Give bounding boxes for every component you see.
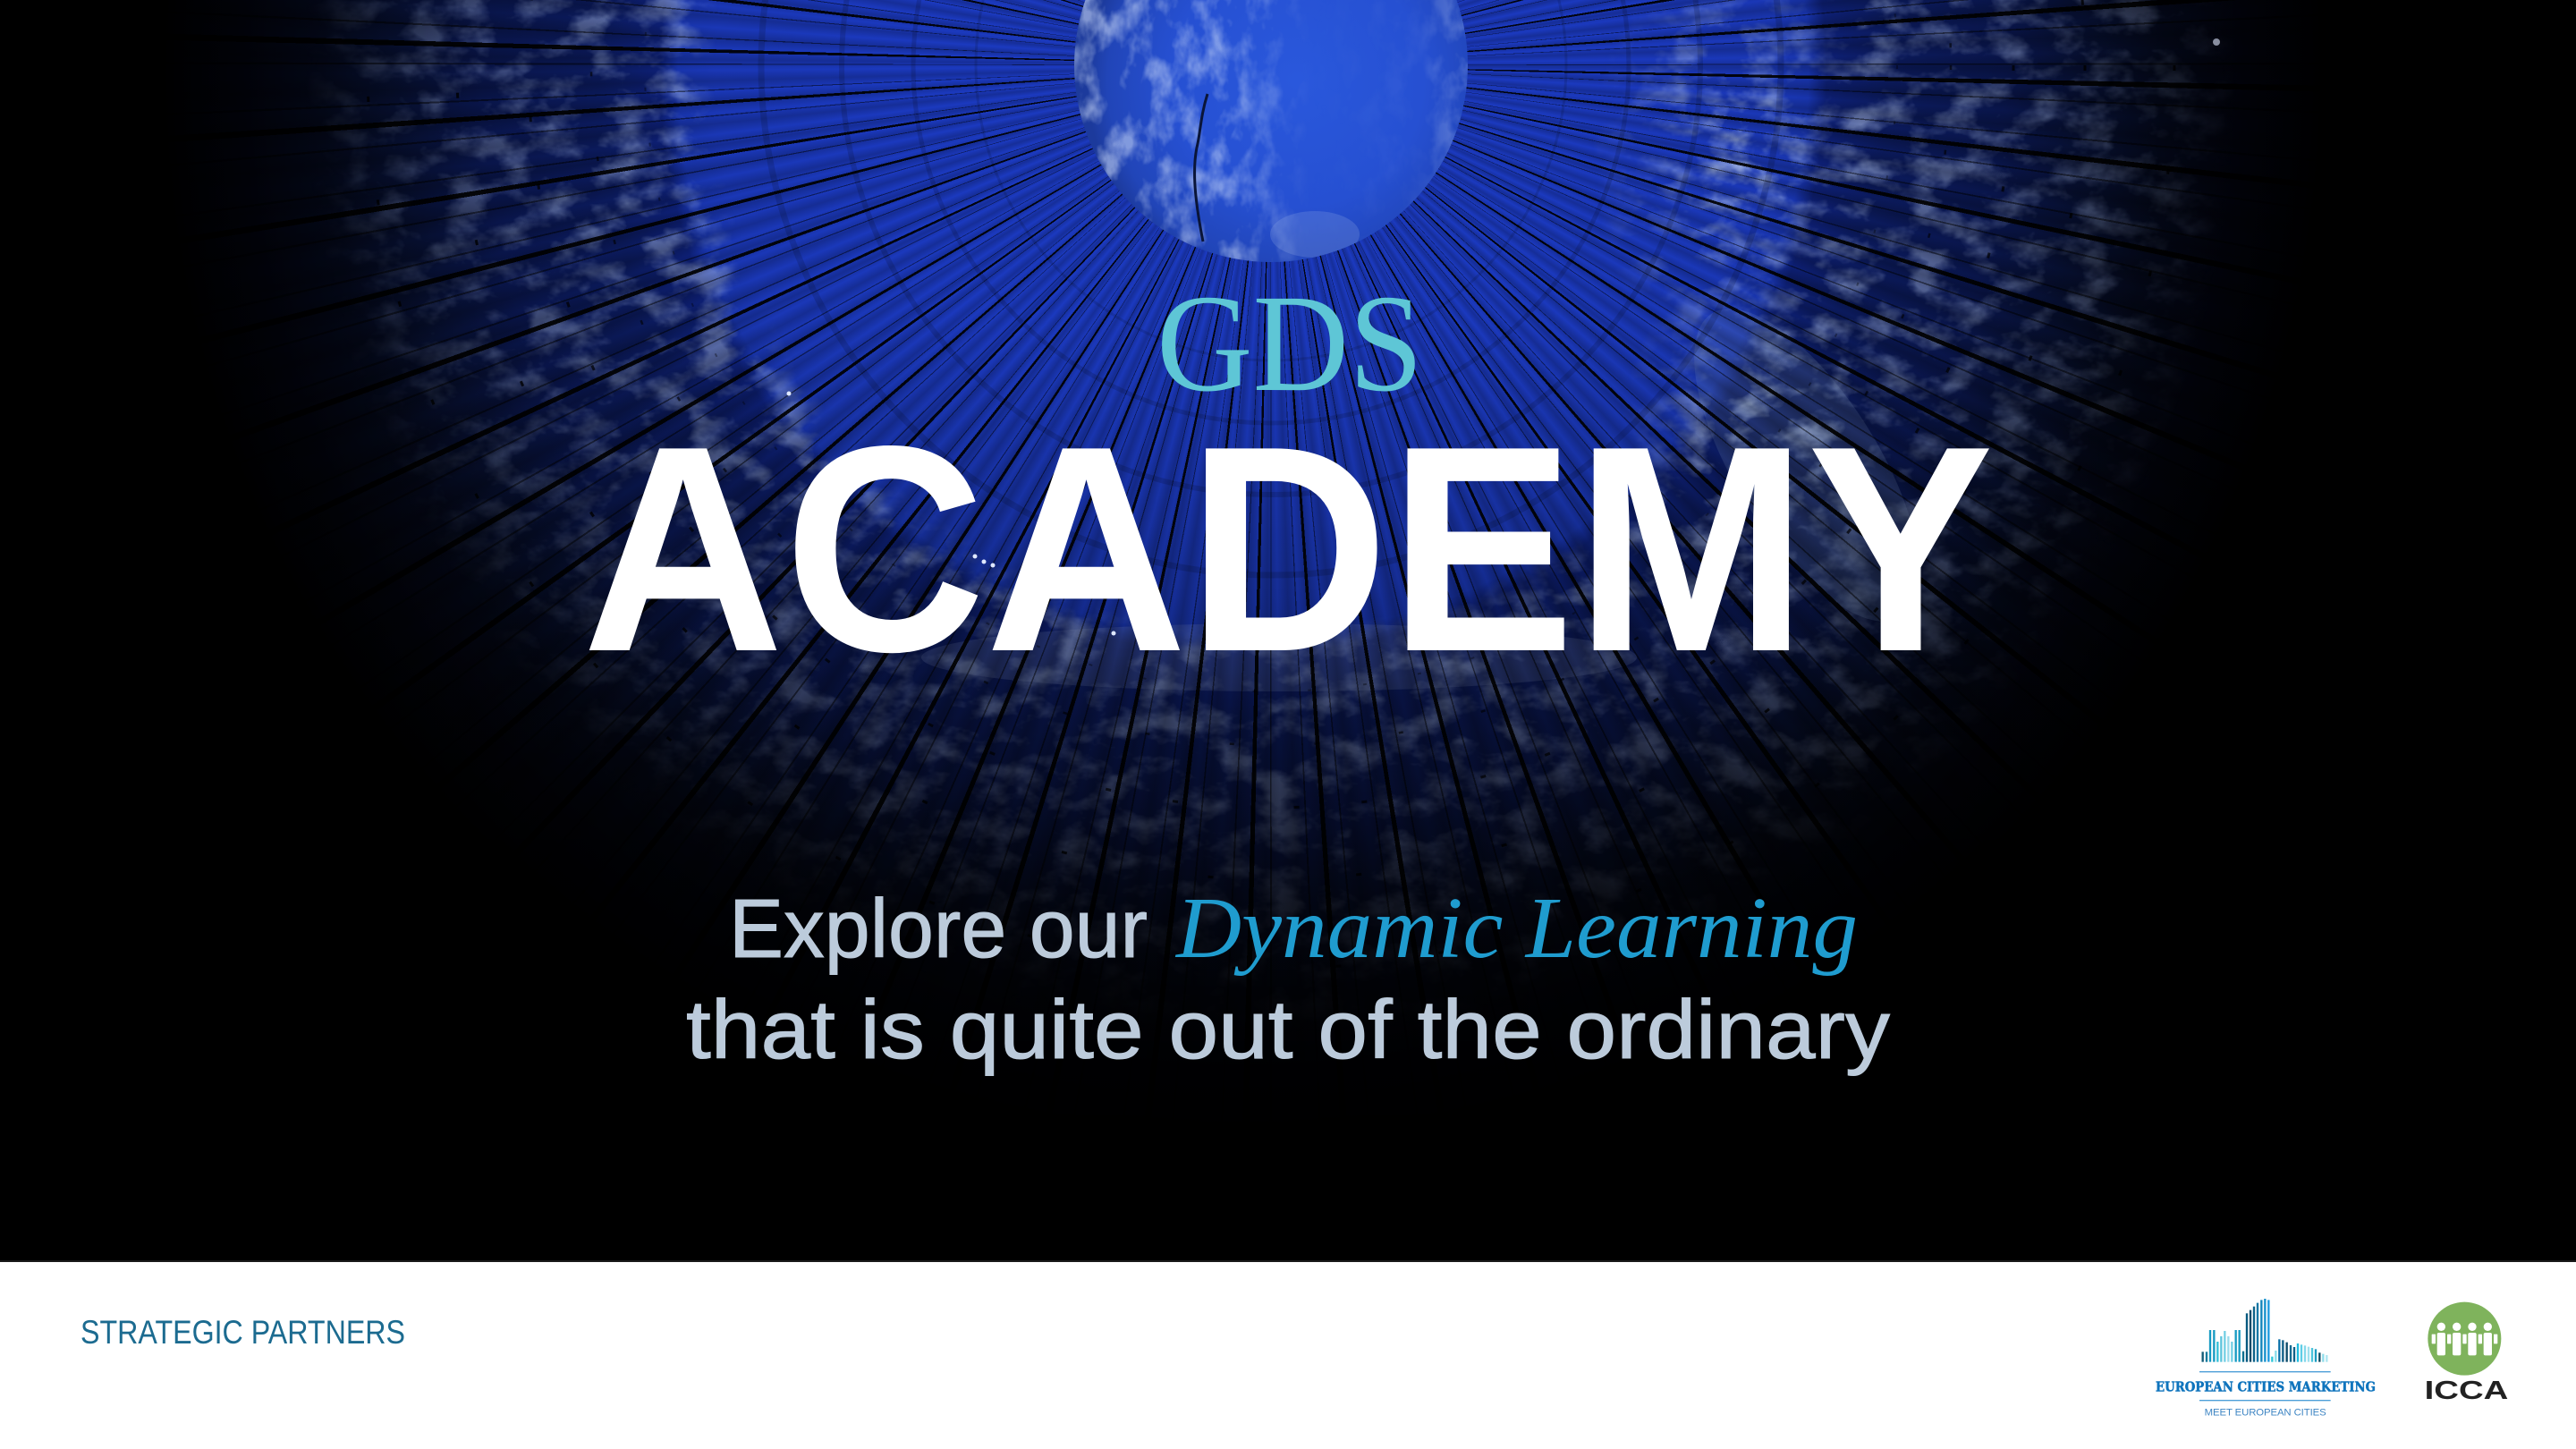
title: ACADEMY: ACADEMY — [582, 385, 1994, 713]
logo: ICCA — [2425, 1302, 2508, 1405]
icon: globe — [1074, 0, 1468, 262]
footer label: STRATEGIC PARTNERS — [80, 1314, 405, 1351]
logo: European Cities Marketing — [2156, 1299, 2376, 1418]
logo: European Cities Marketing: MEET EUROPEAN CITIES — [2205, 1407, 2326, 1418]
subtitle text: Dynamic Learning — [1174, 880, 1858, 977]
title: GDS: GDS — [1157, 266, 1423, 420]
concentric tile seams — [368, 0, 2174, 969]
logo: European Cities Marketing: EUROPEAN CITIES MARKETING — [2156, 1379, 2376, 1395]
cloud reflections on tunnel wall — [326, 0, 2216, 1064]
subtitle text: Explore our — [729, 882, 1148, 975]
grey haze on ring — [1651, 275, 1962, 655]
logo: ICCA: ICCA — [2425, 1377, 2508, 1405]
subtitle text: that is quite out of the ordinary — [686, 983, 1891, 1076]
